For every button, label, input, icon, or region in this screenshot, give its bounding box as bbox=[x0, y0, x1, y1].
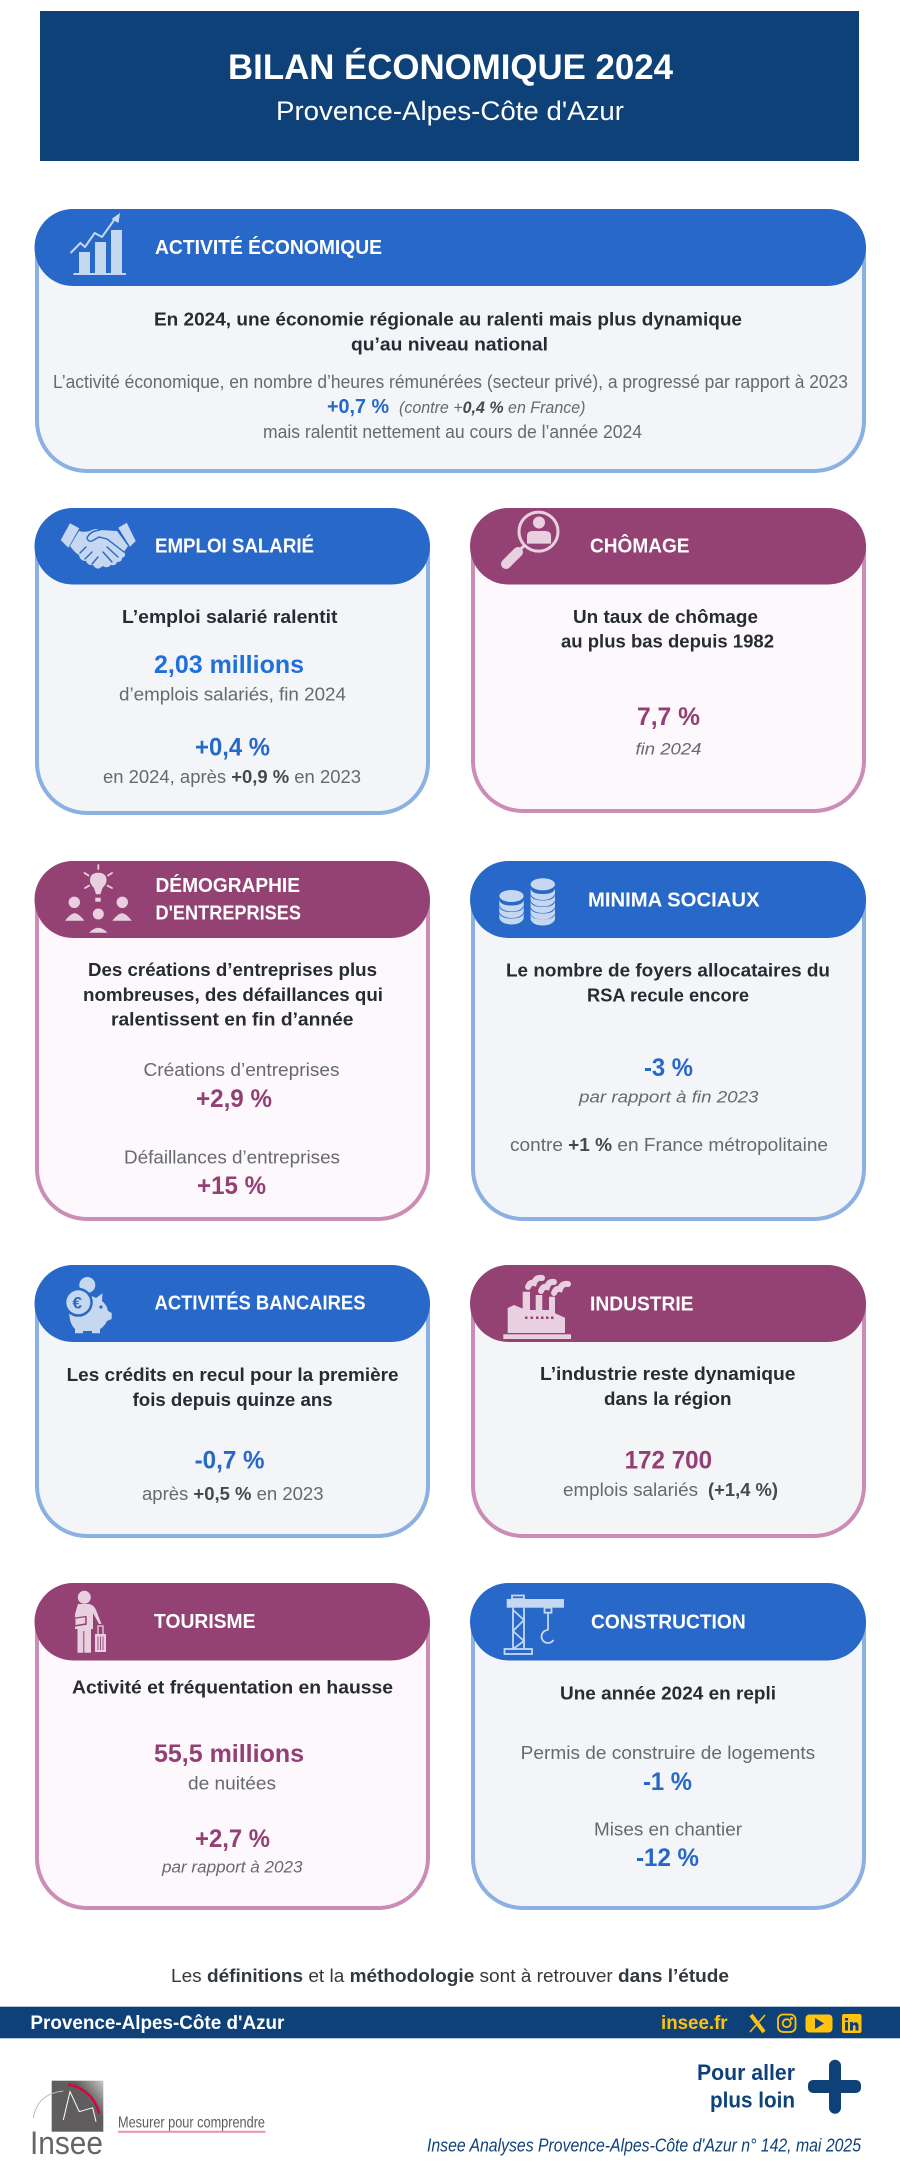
title: BILAN ÉCONOMIQUE 2024 bbox=[228, 47, 674, 87]
icon: magnifier on person bbox=[506, 512, 558, 564]
heading: ACTIVITÉ ÉCONOMIQUE bbox=[155, 236, 382, 259]
panel: activité économique bbox=[34, 209, 866, 471]
comparison: contre +1 % en France métropolitaine bbox=[510, 1135, 828, 1155]
figure: +2,7 % bbox=[195, 1825, 270, 1853]
heading: MINIMA SOCIAUX bbox=[588, 890, 760, 912]
icon: coin stacks bbox=[499, 878, 555, 926]
title banner bbox=[40, 11, 859, 161]
caption: fin 2024 bbox=[636, 740, 702, 759]
icon: X bbox=[750, 2015, 765, 2032]
key message: ralentissent en fin d’année bbox=[111, 1008, 354, 1030]
caption: par rapport à fin 2023 bbox=[578, 1087, 759, 1106]
label: Défaillances d’entreprises bbox=[124, 1148, 340, 1168]
key message: L’industrie reste dynamique bbox=[540, 1363, 796, 1384]
subtitle: Provence-Alpes-Côte d'Azur bbox=[276, 96, 624, 126]
heading: EMPLOI SALARIÉ bbox=[155, 535, 314, 558]
panel: tourisme bbox=[34, 1583, 430, 1908]
icon: rising bar chart bbox=[71, 213, 126, 275]
description bbox=[53, 372, 848, 442]
figure: jobs: 2,03 millions bbox=[154, 651, 304, 679]
caption: (+1,4 %) bbox=[708, 1480, 778, 1500]
description: mais ralentit nettement au cours de l’année 2024 bbox=[263, 422, 642, 442]
heading: D'ENTREPRISES bbox=[156, 903, 301, 925]
figure: -3 % bbox=[644, 1054, 693, 1082]
icon: idea and people bbox=[65, 865, 132, 933]
key message: Les crédits en recul pour la première bbox=[67, 1364, 399, 1385]
icon: factory bbox=[503, 1278, 571, 1339]
figure: -12 % bbox=[636, 1844, 699, 1872]
key message bbox=[67, 1364, 399, 1410]
figure: -0,7 % bbox=[195, 1447, 265, 1475]
figure: 7,7 % bbox=[637, 703, 700, 731]
key message bbox=[561, 606, 774, 652]
key message: qu’au niveau national bbox=[351, 334, 548, 354]
note: definitions: Les définitions et la méthodologie sont à retrouver dans l’étude bbox=[171, 1966, 729, 1986]
figure: 172 700 bbox=[625, 1447, 712, 1475]
panel: chômage bbox=[470, 508, 866, 811]
heading bbox=[156, 874, 301, 925]
caption: emplois salariés bbox=[563, 1480, 698, 1500]
region name: Provence-Alpes-Côte d'Azur bbox=[30, 2013, 285, 2034]
website: insee.fr bbox=[661, 2013, 728, 2034]
caption: d’emplois salariés, fin 2024 bbox=[119, 684, 346, 704]
call to action: pour aller plus loin bbox=[697, 2060, 861, 2114]
heading: CHÔMAGE bbox=[590, 534, 690, 558]
panel: industrie bbox=[470, 1265, 866, 1536]
key message: En 2024, une économie régionale au ralenti mais plus dynamique bbox=[154, 308, 742, 330]
caption: par rapport à 2023 bbox=[161, 1858, 303, 1877]
panel: minima sociaux bbox=[470, 861, 866, 1219]
key message: L’emploi salarié ralentit bbox=[122, 606, 338, 627]
panel: activités bancaires bbox=[34, 1265, 430, 1536]
icon: traveller with suitcase bbox=[74, 1591, 106, 1653]
key message: fois depuis quinze ans bbox=[133, 1389, 333, 1410]
figure: +2,9 % bbox=[196, 1085, 272, 1113]
label: Mises en chantier bbox=[594, 1820, 742, 1840]
key message: Des créations d’entreprises plus bbox=[88, 959, 377, 980]
caption bbox=[563, 1480, 778, 1500]
call to action: pour aller plus loin: Pour aller bbox=[697, 2060, 795, 2085]
icon: handshake bbox=[61, 523, 136, 569]
figure: 55,5 millions bbox=[154, 1740, 304, 1768]
icon: youtube bbox=[806, 2014, 832, 2032]
label: Permis de construire de logements bbox=[521, 1743, 815, 1763]
heading: INDUSTRIE bbox=[590, 1293, 694, 1315]
caption: après +0,5 % en 2023 bbox=[142, 1484, 324, 1504]
key message: Activité et fréquentation en hausse bbox=[72, 1676, 393, 1698]
figure: -1 % bbox=[643, 1768, 692, 1796]
description: L’activité économique, en nombre d’heures rémunérées (secteur privé), a progressé par rapport à 2023 bbox=[53, 372, 848, 392]
wordmark: Insee bbox=[30, 2125, 103, 2161]
heading: ACTIVITÉS BANCAIRES bbox=[154, 1292, 366, 1314]
description: +0,7 % bbox=[327, 396, 389, 418]
key message: au plus bas depuis 1982 bbox=[561, 630, 774, 652]
key message bbox=[154, 308, 742, 354]
icon: plus bbox=[808, 2060, 861, 2114]
key message bbox=[506, 960, 830, 1006]
footer band bbox=[0, 2007, 900, 2038]
call to action: pour aller plus loin: plus loin bbox=[710, 2088, 795, 2113]
key message bbox=[83, 959, 383, 1030]
description: (contre +0,4 % en France) bbox=[399, 398, 586, 417]
heading: DÉMOGRAPHIE bbox=[156, 874, 300, 897]
icon: crane bbox=[504, 1596, 564, 1654]
heading: TOURISME bbox=[154, 1611, 256, 1633]
key message: nombreuses, des défaillances qui bbox=[83, 984, 383, 1005]
caption: en 2024, après +0,9 % en 2023 bbox=[103, 767, 361, 787]
caption: de nuitées bbox=[188, 1774, 276, 1794]
figure: +15 % bbox=[197, 1172, 266, 1200]
panel: construction bbox=[470, 1583, 866, 1908]
figure: growth: +0,4 % bbox=[195, 734, 270, 762]
heading: CONSTRUCTION bbox=[591, 1612, 746, 1634]
icon: piggy bank with euro coin: € bbox=[72, 1294, 82, 1312]
insee logo bbox=[30, 2081, 266, 2161]
key message: Le nombre de foyers allocataires du bbox=[506, 960, 830, 980]
key message: Une année 2024 en repli bbox=[560, 1682, 776, 1704]
icon: instagram bbox=[778, 2014, 796, 2032]
label: Créations d’entreprises bbox=[144, 1060, 340, 1080]
key message: RSA recule encore bbox=[587, 984, 749, 1006]
tagline: Mesurer pour comprendre bbox=[118, 2114, 265, 2132]
panel: emploi salarié bbox=[34, 508, 430, 813]
key message: dans la région bbox=[604, 1388, 732, 1409]
key message: Un taux de chômage bbox=[573, 606, 758, 627]
icon: piggy bank with euro coin bbox=[64, 1277, 112, 1333]
panel: démographie d'entreprises bbox=[34, 861, 430, 1219]
key message bbox=[540, 1363, 796, 1409]
icon: linkedin bbox=[842, 2014, 862, 2033]
